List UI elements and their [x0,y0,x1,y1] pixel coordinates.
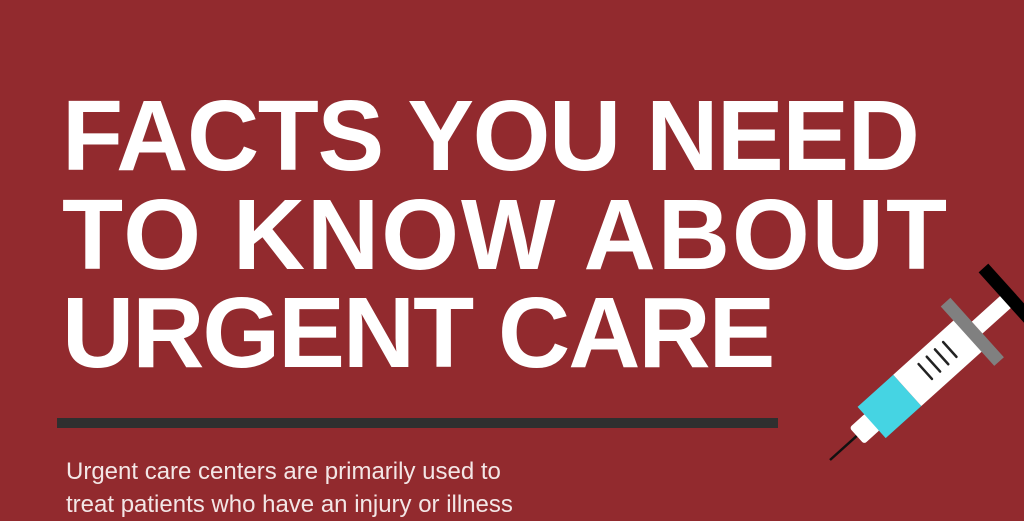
body text [66,458,513,518]
body text: treat patients who have an injury or illness [66,491,513,518]
title [62,80,949,389]
body text: Urgent care centers are primarily used to [66,458,501,485]
title: URGENT CARE [62,277,773,389]
title: TO KNOW ABOUT [62,179,949,291]
title: FACTS YOU NEED [62,80,918,192]
divider bar [57,418,778,428]
